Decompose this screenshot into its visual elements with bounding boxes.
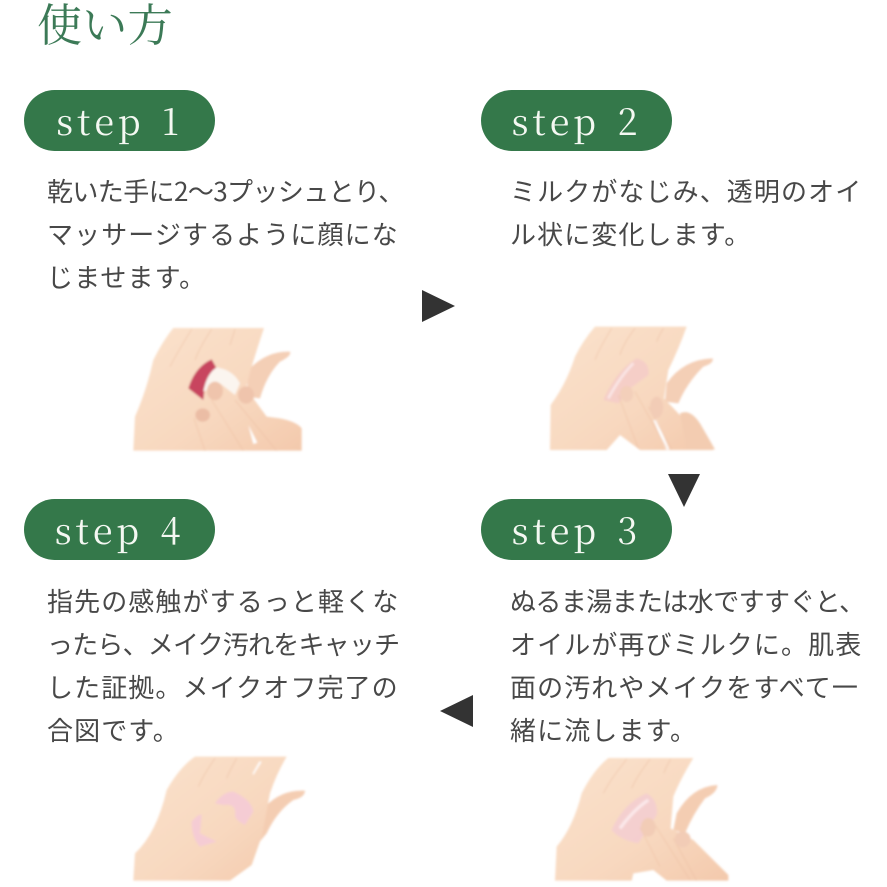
step 4 badge: step 4 <box>55 504 184 555</box>
photo: milk blending on hand <box>549 326 716 452</box>
panel: step 4 <box>24 499 399 882</box>
step 1 text: マッサージするように顔にな <box>47 215 399 252</box>
step 3 badge <box>481 499 672 560</box>
panel: step 3 <box>481 499 865 882</box>
step 3 text: ぬるま湯または水ですすぐと、 <box>510 582 865 619</box>
arrow: step 2 to step 3 <box>668 474 700 507</box>
step 2 badge: step 2 <box>512 95 641 146</box>
arrow: step 1 to step 2 <box>422 290 455 322</box>
step 4 text <box>47 582 399 748</box>
arrow: step 3 to step 4 <box>440 695 473 727</box>
step 2 text: ル状に変化します。 <box>510 215 751 252</box>
step 4 text: 指先の感触がするっと軽くな <box>47 582 399 619</box>
step 2 text: ミルクがなじみ、透明のオイ <box>510 172 862 209</box>
step 1 text: 乾いた手に2〜3プッシュとり、 <box>47 172 404 209</box>
step 4 text: した証拠。メイクオフ完了の <box>47 668 399 705</box>
photo: finished hand <box>132 756 306 882</box>
step 1 badge <box>24 90 215 151</box>
step 3 text <box>510 582 865 748</box>
step 3 text: 面の汚れやメイクをすべて一 <box>510 668 859 705</box>
step 1 text: じませます。 <box>47 258 206 295</box>
step 4 badge <box>24 499 215 560</box>
photo: rinsing with water <box>554 757 730 882</box>
photo: cream placed on hand <box>132 327 303 452</box>
step 4 text: ったら、メイク汚れをキャッチ <box>47 625 399 662</box>
step 3 text: オイルが再びミルクに。肌表 <box>510 625 862 662</box>
step 3 badge: step 3 <box>512 504 641 555</box>
step 4 text: 合図です。 <box>47 711 180 748</box>
step 2 badge <box>481 90 672 151</box>
step 2 text <box>510 172 862 252</box>
panel: step 2 <box>481 90 862 452</box>
step 1 text <box>47 172 404 295</box>
step 3 text: 緒に流します。 <box>510 711 697 748</box>
panel: step 1 <box>24 90 404 452</box>
step 1 badge: step 1 <box>56 95 183 146</box>
